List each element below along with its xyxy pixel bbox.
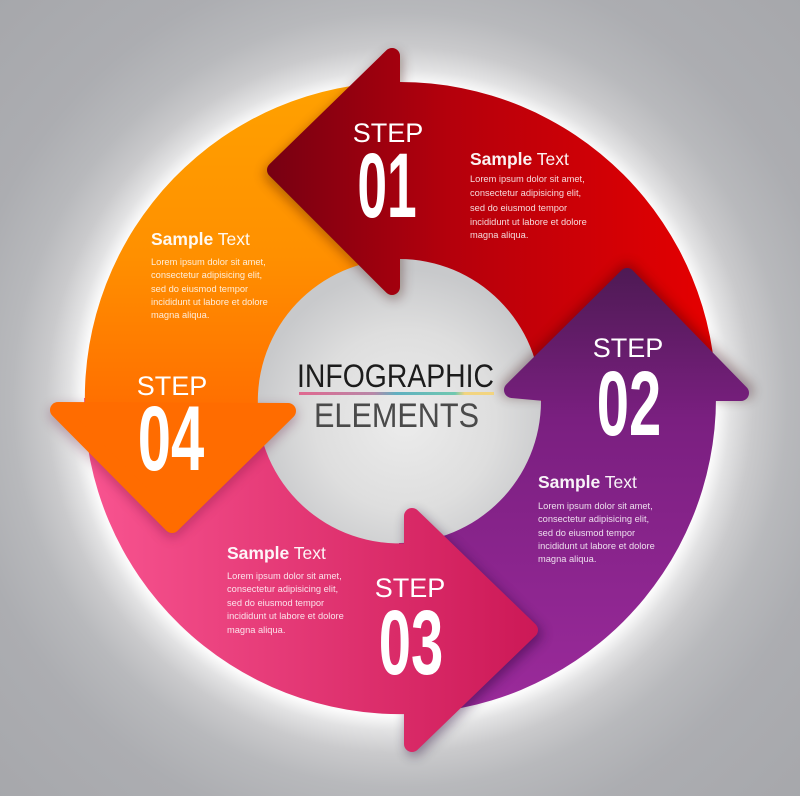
step 01 label: STEP xyxy=(353,118,423,148)
ring band: step 02 purple xyxy=(399,398,716,714)
text block: step 03: consectetur adipisicing elit, xyxy=(227,584,338,594)
text block: step 02 xyxy=(538,472,655,564)
text block: step 04: incididunt ut labore et dolore xyxy=(151,297,268,307)
text block: step 01: incididunt ut labore et dolore xyxy=(470,217,587,227)
text block: step 01: Lorem ipsum dolor sit amet, xyxy=(470,174,585,184)
text block: step 04: consectetur adipisicing elit, xyxy=(151,270,262,280)
text block: step 03: sed do eiusmod tempor xyxy=(227,598,324,608)
text block: step 02: Sample Text xyxy=(538,472,637,492)
text block: step 03: magna aliqua. xyxy=(227,625,285,635)
step 02 label: STEP xyxy=(593,333,663,363)
text block: step 02: Lorem ipsum dolor sit amet, xyxy=(538,501,653,511)
text block: step 01: magna aliqua. xyxy=(470,230,528,240)
text block: step 02: consectetur adipisicing elit, xyxy=(538,514,649,524)
ring band: step 03 pink xyxy=(84,398,410,714)
centre hole xyxy=(253,255,545,547)
text block: step 03: Lorem ipsum dolor sit amet, xyxy=(227,571,342,581)
arrow: step 01 xyxy=(273,56,394,291)
text block: step 03: Sample Text xyxy=(227,543,326,563)
text block: step 04: Sample Text xyxy=(151,229,250,249)
text block: step 04: Lorem ipsum dolor sit amet, xyxy=(151,257,266,267)
text block: step 02: incididunt ut labore et dolore xyxy=(538,541,655,551)
step 04 label: STEP xyxy=(137,371,207,401)
text block: step 01: consectetur adipisicing elit, xyxy=(470,188,581,198)
text block: step 02: magna aliqua. xyxy=(538,554,596,564)
step 03 label: STEP xyxy=(375,573,445,603)
text block: step 04 xyxy=(151,229,268,320)
text block: step 04: magna aliqua. xyxy=(151,310,209,320)
text block: step 03: incididunt ut labore et dolore xyxy=(227,611,344,621)
text block: step 01 xyxy=(470,149,587,240)
step 02 label: 02 xyxy=(597,352,661,455)
title xyxy=(297,358,494,435)
step 03 label: 03 xyxy=(379,591,443,694)
text block: step 01: sed do eiusmod tempor xyxy=(470,203,567,213)
arrow: step 02 xyxy=(509,272,745,393)
title: INFOGRAPHIC xyxy=(297,358,494,394)
ring band: step 01 red xyxy=(399,82,716,401)
step 04 label: 04 xyxy=(138,388,204,490)
ring band: step 04 orange xyxy=(85,82,400,408)
arrow: step 04 xyxy=(58,410,288,529)
text block: step 03 xyxy=(227,543,344,635)
step 01 label: 01 xyxy=(357,134,417,237)
text block: step 04: sed do eiusmod tempor xyxy=(151,284,248,294)
title: ELEMENTS xyxy=(314,397,479,435)
text block: step 02: sed do eiusmod tempor xyxy=(538,528,635,538)
arrow: step 03 xyxy=(412,516,534,748)
text block: step 01: Sample Text xyxy=(470,149,569,169)
